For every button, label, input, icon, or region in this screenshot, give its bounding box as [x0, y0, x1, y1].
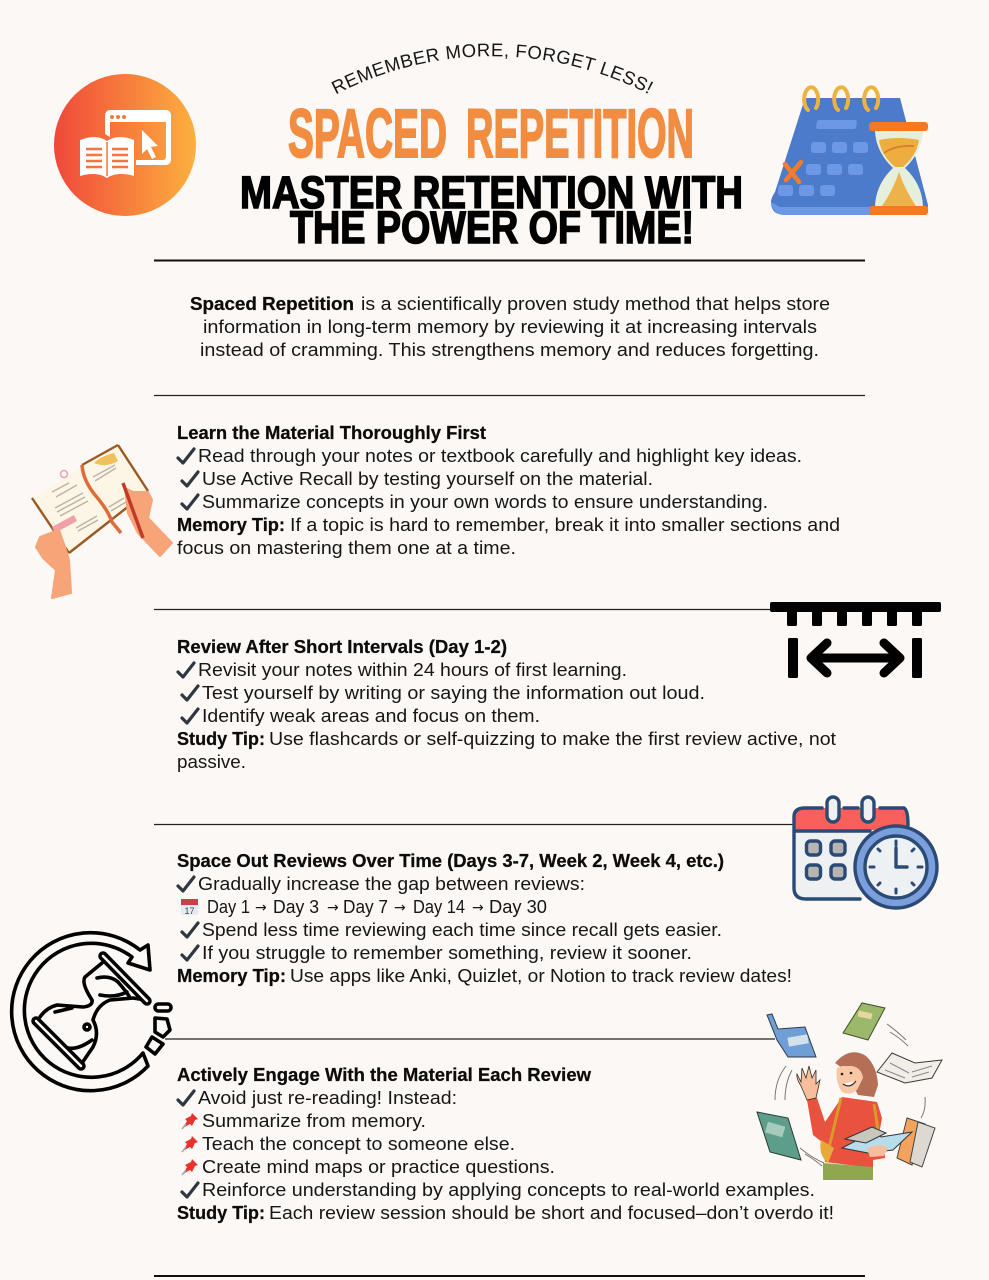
day sequence: Day 3 [273, 897, 319, 917]
day sequence: → [394, 900, 406, 916]
headline: MASTER RETENTION WITH [240, 167, 743, 218]
section 4 text: Study Tip: [177, 1203, 265, 1223]
section 4 text: Each review session should be short and focused–don’t overdo it! [269, 1203, 834, 1223]
intro paragraph: is a scientifically proven study method that helps store [361, 294, 830, 314]
icon: calendar with clock [794, 797, 937, 908]
section 3 text: Use apps like Anki, Quizlet, or Notion to track review dates! [290, 966, 792, 986]
section 4 text [177, 1065, 834, 1223]
section 2 text: Revisit your notes within 24 hours of first learning. [198, 660, 627, 680]
icon: calendar emoji [181, 899, 198, 916]
section 3 text: Memory Tip: [177, 966, 286, 986]
section 1 text [177, 423, 840, 558]
section 2 text: Identify weak areas and focus on them. [202, 706, 540, 726]
intro paragraph [190, 294, 830, 360]
intro paragraph: instead of cramming. This strengthens memory and reduces forgetting. [200, 340, 819, 360]
headline: THE POWER OF TIME! [290, 202, 694, 253]
day sequence: Day 14 [413, 897, 465, 917]
section 2 text: Use flashcards or self-quizzing to make the first review active, not [269, 729, 836, 749]
section 4 text: Actively Engage With the Material Each Review [177, 1065, 592, 1085]
icon: ruler and interval arrow [770, 602, 941, 678]
section 1 text: Learn the Material Thoroughly First [177, 423, 486, 443]
icon: hourglass in circular arrow [12, 933, 171, 1091]
day sequence: → [327, 900, 339, 916]
intro paragraph: information in long-term memory by reviewing it at increasing intervals [203, 317, 817, 337]
illustration: student with flying books [757, 1003, 942, 1180]
section 4 text: Teach the concept to someone else. [202, 1134, 515, 1154]
section 4 text: Create mind maps or practice questions. [202, 1157, 555, 1177]
icon: pushpin [182, 1136, 198, 1152]
section 1 text: Summarize concepts in your own words to ensure understanding. [202, 492, 768, 512]
section 3 text [177, 851, 792, 986]
section 3 text: Spend less time reviewing each time since recall gets easier. [202, 920, 722, 940]
day sequence: → [472, 900, 484, 916]
section 1 text: focus on mastering them one at a time. [177, 538, 516, 558]
day sequence: Day 1 [207, 897, 250, 917]
icon: calendar and hourglass [771, 87, 928, 215]
title: REPETITION [466, 95, 694, 172]
title [288, 95, 694, 172]
section 3 text: Gradually increase the gap between reviews: [198, 874, 585, 894]
intro paragraph: Spaced Repetition [190, 294, 354, 314]
day sequence: Day 7 [343, 897, 388, 917]
section 4 text: Avoid just re-reading! Instead: [198, 1088, 457, 1108]
subtitle arc: REMEMBER MORE, FORGET LESS! [331, 44, 654, 94]
icon: pushpin [182, 1159, 198, 1175]
section 4 text: Reinforce understanding by applying concepts to real-world examples. [202, 1180, 815, 1200]
headline [240, 167, 743, 253]
section 1 text: If a topic is hard to remember, break it into smaller sections and [290, 515, 840, 535]
section 1 text: Read through your notes or textbook carefully and highlight key ideas. [198, 446, 802, 466]
day sequence: Day 30 [489, 897, 547, 917]
section 3 text: Space Out Reviews Over Time (Days 3-7, Week 2, Week 4, etc.) [177, 851, 724, 871]
icon: pushpin [182, 1113, 198, 1129]
section 3 text: If you struggle to remember something, review it sooner. [202, 943, 692, 963]
icon: book and browser badge [54, 74, 196, 216]
section 4 text: Summarize from memory. [202, 1111, 426, 1131]
day sequence [207, 897, 547, 917]
section 2 text: Review After Short Intervals (Day 1-2) [177, 637, 507, 657]
day sequence: → [255, 900, 267, 916]
section 2 text: passive. [177, 752, 246, 772]
section 2 text: Test yourself by writing or saying the information out loud. [202, 683, 705, 703]
section 1 text: Memory Tip: [177, 515, 285, 535]
section 2 text: Study Tip: [177, 729, 265, 749]
section 1 text: Use Active Recall by testing yourself on the material. [202, 469, 653, 489]
illustration: hands on open book [32, 445, 172, 598]
icon: calendar emoji: 17 [184, 906, 195, 916]
section 2 text [177, 637, 836, 772]
title: SPACED [288, 95, 447, 172]
